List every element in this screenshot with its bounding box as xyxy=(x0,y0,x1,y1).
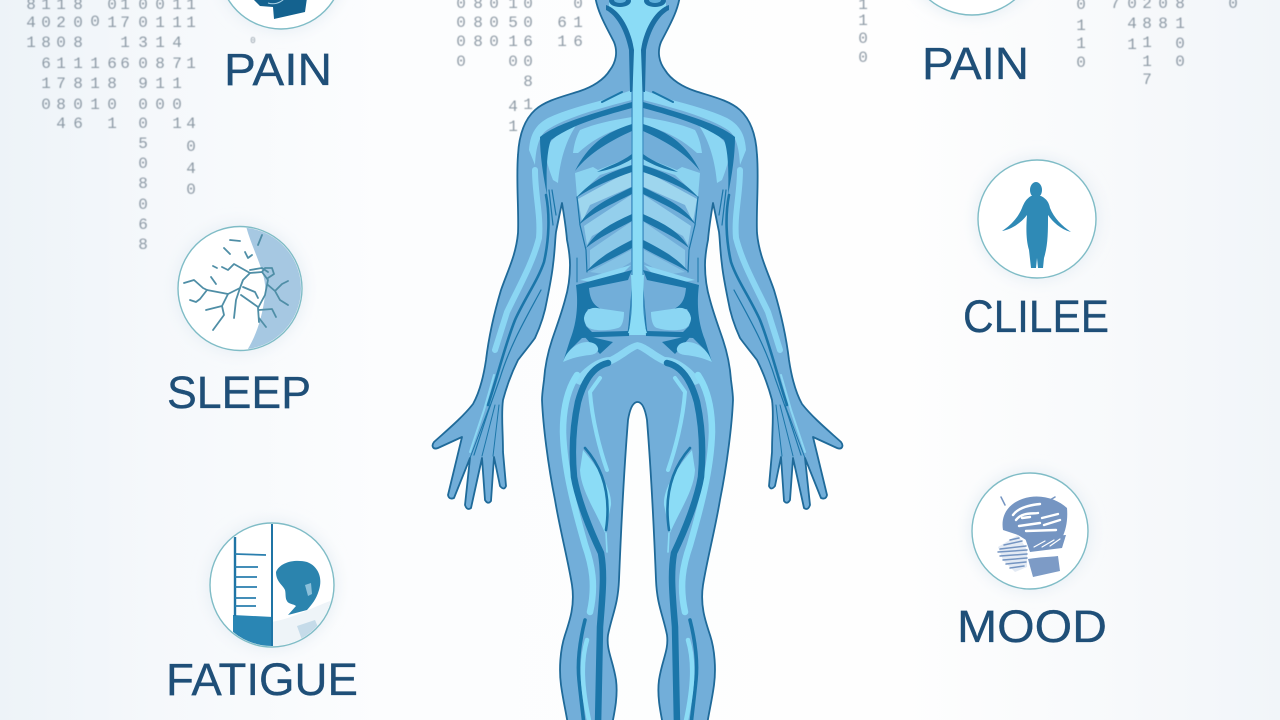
background digits: left column cluster: 6 xyxy=(107,55,117,73)
background digits: left column cluster: 1 xyxy=(120,34,130,52)
icon: pain xyxy=(252,0,307,19)
central human body figure xyxy=(433,0,842,720)
background digits: right cluster: 1 xyxy=(1142,53,1152,71)
background digits: centre cluster: 6 xyxy=(557,14,567,32)
panel: pain top left xyxy=(226,0,337,32)
background digits: right cluster: 1 xyxy=(1127,36,1137,54)
background digits: left column cluster: 1 xyxy=(107,14,117,32)
icon: standing person xyxy=(1002,182,1071,268)
background digits: right cluster: 1 xyxy=(1175,15,1185,33)
background digits: left column cluster: 6 xyxy=(138,216,148,234)
background digits: centre cluster: 8 xyxy=(473,33,483,51)
background digits: left column cluster: 8 xyxy=(107,75,117,93)
label: sleep: SLEEP xyxy=(167,367,311,418)
background digits: left column cluster: 7 xyxy=(56,75,66,93)
background digits: centre cluster: 0 xyxy=(456,53,466,71)
background digits: centre cluster: 6 xyxy=(573,33,583,51)
background digits: centre cluster: 8 xyxy=(523,73,533,91)
background digits: centre cluster: 0 xyxy=(508,53,518,71)
background digits: centre cluster: 0 xyxy=(523,53,533,71)
background digits: centre cluster: 0 xyxy=(489,14,499,32)
background digits: left column cluster: 1 xyxy=(172,115,182,133)
background digits: right cluster: 7 xyxy=(1142,71,1152,89)
background digits: right cluster: 0 xyxy=(858,49,868,67)
background digits: left column cluster: 8 xyxy=(73,75,83,93)
icon: cracked moon xyxy=(184,226,310,352)
icon: tired person by window xyxy=(233,523,333,650)
background digits: centre cluster: 1 xyxy=(557,33,567,51)
background digits: left column cluster: 8 xyxy=(155,55,165,73)
background digits: centre cluster: 0 xyxy=(523,14,533,32)
background digits: left column cluster: 0 xyxy=(155,96,165,114)
background digits: left column cluster: 0 xyxy=(73,96,83,114)
icon: sketched head xyxy=(998,497,1067,577)
label: pain left: PAIN xyxy=(224,44,332,95)
background digits: centre cluster: 5 xyxy=(508,14,518,32)
panel: fatigue xyxy=(207,520,337,650)
background digits: left column cluster: 1 xyxy=(172,14,182,32)
panel: clilee xyxy=(975,157,1099,281)
background digits: left column cluster: 1 xyxy=(56,55,66,73)
background digits: right cluster: 8 xyxy=(1158,15,1168,33)
background digits: left column cluster: 0 xyxy=(138,14,148,32)
background digits: left column cluster: 0 xyxy=(73,14,83,32)
background digits: left column cluster xyxy=(26,0,256,254)
background digits: left column cluster: 1 xyxy=(41,75,51,93)
background digits: left column cluster: 5 xyxy=(138,135,148,153)
background digits: centre cluster: 6 xyxy=(523,33,533,51)
background digits: centre cluster: 1 xyxy=(523,96,533,114)
background digits: right cluster: 0 xyxy=(1076,54,1086,72)
background digits: left column cluster: 7 xyxy=(172,55,182,73)
background digits: left column cluster: 4 xyxy=(56,115,66,133)
background digits: left column cluster: 0 xyxy=(107,96,117,114)
background digits: left column cluster: 8 xyxy=(56,96,66,114)
background digits: left column cluster: 1 xyxy=(186,55,196,73)
background digits: left column cluster: 0 xyxy=(138,196,148,214)
background digits: left column cluster: 0 xyxy=(138,155,148,173)
background digits: right cluster: 0 xyxy=(858,30,868,48)
background digits: left column cluster: 0 xyxy=(138,115,148,133)
background digits: left column cluster: 6 xyxy=(73,115,83,133)
background digits: right cluster: 0 xyxy=(1175,53,1185,71)
background digits: left column cluster: 8 xyxy=(41,34,51,52)
background digits: left column cluster: 1 xyxy=(155,75,165,93)
background digits: centre cluster: 1 xyxy=(573,14,583,32)
background digits: left column cluster: 4 xyxy=(186,160,196,178)
background digits: left column cluster: 1 xyxy=(90,55,100,73)
panel: pain top right xyxy=(902,0,1042,18)
background digits: left column cluster: 4 xyxy=(26,14,36,32)
background digits: right cluster: 8 xyxy=(1142,15,1152,33)
background digits: left column cluster: 1 xyxy=(155,34,165,52)
background digits: right cluster: 4 xyxy=(1127,15,1137,33)
background digits: left column cluster: 0 xyxy=(41,96,51,114)
background digits: centre cluster: 0 xyxy=(489,33,499,51)
background digits: left column cluster: 0 xyxy=(41,14,51,32)
background digits: left column cluster: 0 xyxy=(172,96,182,114)
background digits: left column cluster: 1 xyxy=(186,14,196,32)
background digits: right cluster: 1 xyxy=(1076,17,1086,35)
background digits: left column cluster: 1 xyxy=(26,34,36,52)
background digits: left column cluster: 4 xyxy=(186,115,196,133)
label: mood: MOOD xyxy=(957,601,1107,652)
background digits: left column cluster: 1 xyxy=(73,55,83,73)
background digits: centre cluster: 0 xyxy=(456,14,466,32)
background digits: left column cluster: 8 xyxy=(73,34,83,52)
background digits: left column cluster: 6 xyxy=(41,55,51,73)
background digits: left column cluster: 0 xyxy=(90,13,100,31)
label: fatigue: FATIGUE xyxy=(166,654,358,705)
background digits: right cluster xyxy=(858,0,1238,89)
background digits: left column cluster: 1 xyxy=(172,75,182,93)
background digits: left column cluster: 2 xyxy=(56,14,66,32)
background digits: centre cluster: 4 xyxy=(508,98,518,116)
background digits: centre cluster: 1 xyxy=(508,118,518,136)
background digits: left column cluster: 7 xyxy=(120,14,130,32)
background digits: left column cluster: 0 xyxy=(138,55,148,73)
background digits: centre cluster: 1 xyxy=(508,33,518,51)
background digits: right cluster: 0 xyxy=(1175,35,1185,53)
label: clilee: CLILEE xyxy=(963,291,1109,342)
label: pain right: PAIN xyxy=(922,38,1029,89)
background digits: left column cluster: 9 xyxy=(138,75,148,93)
background digits: right cluster: 1 xyxy=(858,12,868,30)
background digits: left column cluster: 8 xyxy=(138,236,148,254)
background digits: right cluster: 1 xyxy=(1142,34,1152,52)
background digits: left column cluster: 0 xyxy=(186,181,196,199)
background digits: left column cluster: 0 xyxy=(186,138,196,156)
background digits: left column cluster: 4 xyxy=(172,34,182,52)
background digits: right cluster: 1 xyxy=(1076,35,1086,53)
panel: sleep xyxy=(175,224,310,354)
background digits: left column cluster: 0 xyxy=(250,36,256,46)
background digits: left column cluster: 1 xyxy=(90,96,100,114)
background digits: left column cluster: 0 xyxy=(56,34,66,52)
background digits: centre cluster: 8 xyxy=(473,14,483,32)
background digits: left column cluster: 8 xyxy=(138,175,148,193)
background digits: centre cluster xyxy=(456,0,583,136)
background digits: left column cluster: 6 xyxy=(120,55,130,73)
background digits: centre cluster: 0 xyxy=(456,33,466,51)
background digits: left column cluster: 0 xyxy=(138,96,148,114)
background digits: left column cluster: 1 xyxy=(107,115,117,133)
background digits: left column cluster: 3 xyxy=(138,34,148,52)
panel: mood xyxy=(969,470,1091,592)
background digits: left column cluster: 1 xyxy=(155,14,165,32)
background digits: left column cluster: 1 xyxy=(90,75,100,93)
